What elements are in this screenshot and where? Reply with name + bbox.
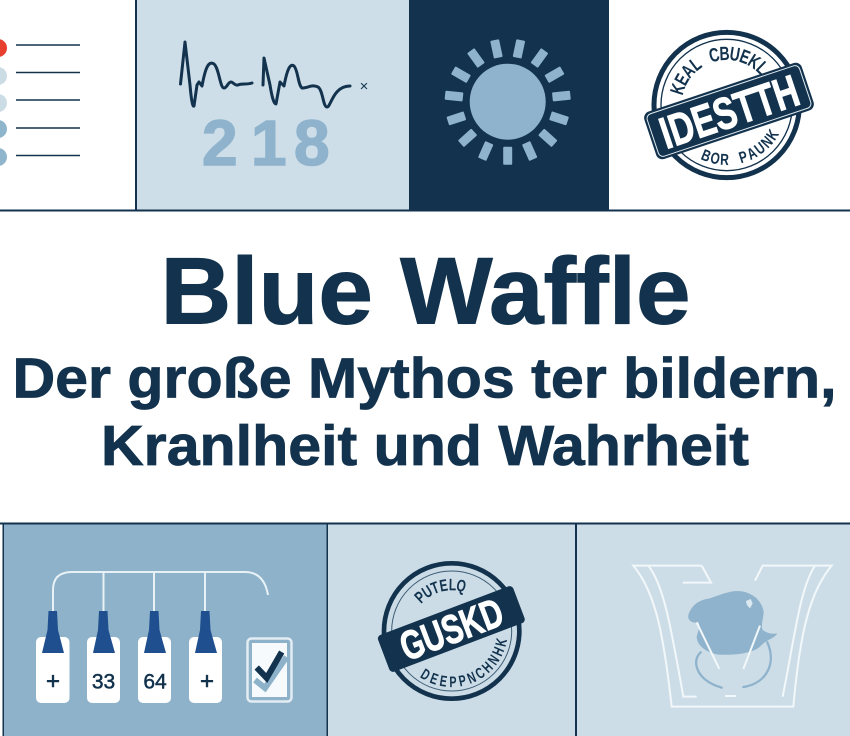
icon: sun: [445, 39, 571, 165]
stamp top lettering: [412, 577, 468, 607]
bottle 4: +: [200, 668, 214, 695]
panel: heart rate: [137, 0, 409, 210]
subtitle line 1: Der große Mythos ter bildern,: [12, 346, 836, 410]
stamp top lettering: U: [419, 583, 436, 603]
ecg line: [180, 42, 350, 107]
stamp top lettering: P: [412, 588, 430, 607]
bottle 4: [189, 611, 222, 703]
stamp bottom lettering: N: [757, 133, 776, 151]
glass outline: [633, 566, 832, 707]
bottle 3: 64: [143, 670, 167, 694]
stamp top lettering: T: [429, 579, 442, 599]
stamp bottom lettering: U: [751, 138, 769, 158]
stamp bottom lettering: [699, 125, 783, 169]
stamp bottom lettering: [418, 636, 511, 691]
stamp top lettering: Q: [455, 577, 468, 597]
panel: test bottles: [4, 524, 326, 736]
connecting wires: [53, 572, 268, 611]
number: 218: [202, 107, 330, 179]
stamp band: [376, 582, 527, 676]
stamp bottom lettering: H: [478, 658, 496, 676]
icon: checked card: [248, 638, 292, 702]
stamp bottom lettering: H: [489, 644, 508, 659]
stamp bottom lettering: N: [465, 668, 478, 687]
stamp top lettering: U: [728, 43, 742, 66]
stamp top lettering: E: [670, 70, 694, 89]
stamp top lettering: C: [707, 43, 722, 67]
list markers: [0, 39, 7, 166]
bottle 1: +: [46, 668, 60, 695]
stamp bottom lettering: D: [418, 665, 433, 684]
bottle 2: [87, 611, 120, 703]
stamp bottom lettering: A: [744, 143, 760, 163]
title: Blue Waffle: [160, 238, 690, 344]
stamp top lettering: L: [752, 57, 773, 79]
stamp bottom lettering: K: [762, 125, 783, 143]
stamp bottom lettering: N: [484, 652, 503, 668]
glass and figure: [633, 566, 832, 707]
stamp bottom lettering: O: [709, 148, 722, 168]
stamp bottom lettering: P: [457, 671, 468, 690]
panel: stamp top right: [609, 0, 850, 210]
curved arms: [696, 642, 771, 688]
stamp top lettering: K: [666, 81, 690, 97]
panel: glass illustration: [577, 524, 850, 736]
stamp band: GUSKD: [393, 589, 509, 670]
small cross: ×: [360, 78, 368, 95]
stamp bottom lettering: B: [699, 145, 714, 165]
stamp bottom lettering: R: [720, 150, 729, 169]
stamp bottom lettering: E: [428, 669, 441, 688]
stamp: IDESTTH: [642, 32, 816, 178]
stamp bottom lettering: E: [438, 672, 448, 690]
figure highlight: [746, 599, 753, 608]
stamp top lettering: E: [438, 577, 450, 596]
stamp bottom lettering: C: [472, 664, 488, 683]
stamp top lettering: L: [686, 53, 706, 75]
panel: checklist: [0, 0, 136, 210]
stamp band: [642, 61, 816, 162]
stamp bottom lettering: P: [737, 147, 750, 167]
stamp top lettering: E: [737, 45, 753, 69]
figure blob: [688, 591, 777, 655]
list lines: [16, 45, 80, 156]
stamp top lettering: B: [719, 43, 730, 65]
stamp: GUSKD: [376, 563, 527, 699]
panel: stamp bottom: [328, 524, 575, 736]
bottle 3: [138, 611, 171, 703]
bottle 2: 33: [92, 670, 115, 694]
panel: sun: [409, 0, 609, 210]
stamp band: IDESTTH: [653, 65, 805, 159]
stamp top lettering: K: [744, 50, 764, 74]
stamp top lettering: L: [449, 577, 456, 595]
subtitle line 2: Kranlheit und Wahrheit: [101, 414, 749, 478]
stamp top lettering: A: [677, 60, 700, 82]
stamp top lettering: [666, 43, 773, 97]
bottle 1: [36, 611, 70, 703]
stamp bottom lettering: K: [492, 636, 511, 648]
stamp bottom lettering: P: [449, 673, 457, 691]
